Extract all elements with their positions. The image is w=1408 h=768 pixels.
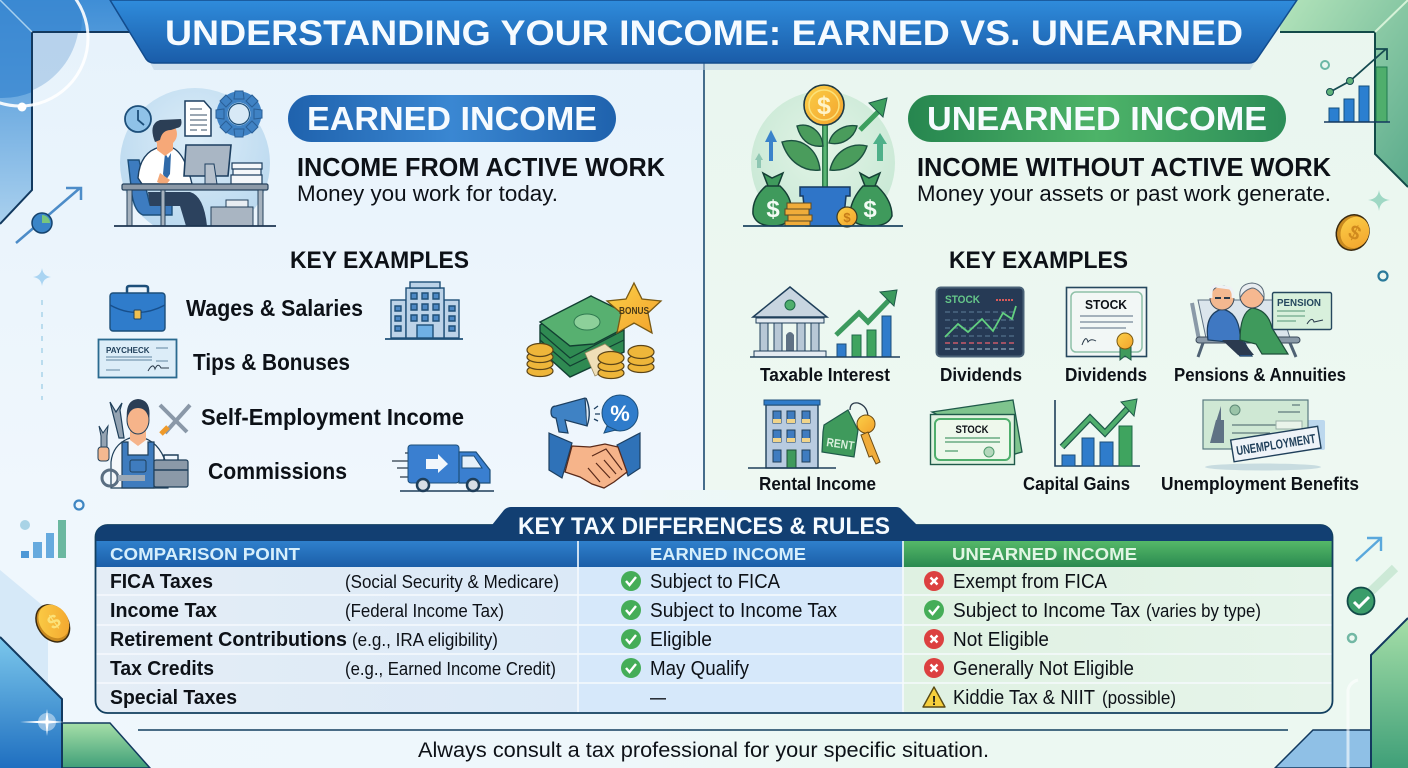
panel: tax comparison table <box>96 507 1332 713</box>
decoration: left coin: $ <box>44 610 65 634</box>
icon: megaphone and percent bubble <box>551 395 638 433</box>
icon: plant with coin <box>743 85 903 235</box>
pill: unearned income <box>908 95 1286 142</box>
text: capital gains: Capital Gains <box>1023 474 1130 494</box>
icon: stock notes: STOCK <box>956 424 989 436</box>
text: rental income: Rental Income <box>759 474 876 494</box>
footer note: Always consult a tax professional for your specific situation. <box>418 738 989 762</box>
icon: capital gains chart <box>1055 399 1140 466</box>
row: income tax: Subject to Income Tax <box>650 600 837 622</box>
row: FICA taxes: FICA Taxes <box>110 571 213 593</box>
decoration: right sparkle, coin and ring: $ <box>1345 221 1364 246</box>
row: FICA taxes <box>110 571 1108 593</box>
text: tips and bonuses: Tips & Bonuses <box>193 349 350 375</box>
text: unemployment benefits: Unemployment Benefits <box>1161 474 1359 494</box>
icon: paycheck: PAYCHECK <box>106 346 150 355</box>
icon: plant with coin: $ <box>843 210 851 225</box>
tab: table heading: KEY TAX DIFFERENCES & RULES <box>518 513 890 540</box>
icon: handshake <box>549 433 640 488</box>
row: retirement contributions <box>110 629 1049 651</box>
decoration: top right mini chart <box>1321 49 1390 122</box>
icon: money stack with bonus star <box>527 283 661 378</box>
pill: earned income <box>288 95 616 142</box>
tab: table heading <box>96 507 1332 541</box>
text: dividends two: Dividends <box>1065 365 1147 385</box>
corner: bottom left <box>0 570 150 768</box>
icon: stock notes <box>930 400 1022 464</box>
decoration: left mini bars <box>20 500 84 558</box>
icon: retired couple with pension <box>1192 283 1332 357</box>
icon: rental building with key <box>748 400 880 468</box>
icon: retired couple with pension: PENSION <box>1277 297 1321 309</box>
row: retirement contributions: Not Eligible <box>953 629 1049 651</box>
icon: stock board <box>936 288 1024 356</box>
divider <box>703 62 705 490</box>
text: self-employment income: Self-Employment Income <box>201 404 464 430</box>
text: pensions and annuities: Pensions & Annuities <box>1174 365 1346 385</box>
row: special taxes: ! <box>932 693 936 708</box>
table header row: EARNED INCOME <box>650 544 806 564</box>
text: earned income definition <box>297 152 665 206</box>
table header row: COMPARISON POINT <box>110 544 300 564</box>
decoration: left arrow with dot <box>16 188 81 243</box>
text: commissions: Commissions <box>208 458 347 484</box>
row: income tax: Subject to Income Tax <box>953 600 1140 622</box>
row: retirement contributions: Eligible <box>650 629 712 651</box>
text: wages and salaries: Wages & Salaries <box>186 295 363 321</box>
row: income tax: (varies by type) <box>1146 601 1261 621</box>
row: income tax: (Federal Income Tax) <box>345 601 504 621</box>
row: special taxes: — <box>650 687 666 709</box>
heading: key examples left: KEY EXAMPLES <box>290 247 469 274</box>
row: special taxes <box>110 687 1176 709</box>
text: earned income definition: INCOME FROM ACTIVE WORK <box>297 152 665 182</box>
icon: plant with coin: $ <box>863 196 877 223</box>
corner: bottom right <box>1275 618 1408 768</box>
icon: plant with coin: $ <box>766 196 780 223</box>
row: tax credits: (e.g., Earned Income Credit) <box>345 659 556 679</box>
heading: key examples right: KEY EXAMPLES <box>949 247 1128 274</box>
icon: office building <box>385 282 463 339</box>
row: tax credits: May Qualify <box>650 658 749 680</box>
icon: delivery truck <box>392 445 494 491</box>
icon: paycheck <box>98 340 176 378</box>
text: unearned income definition <box>917 152 1331 206</box>
row: retirement contributions: (e.g., IRA eligibility) <box>352 630 498 650</box>
icon: money stack with bonus star: BONUS <box>619 306 649 317</box>
text: earned income definition: Money you work for today. <box>297 181 558 206</box>
pill: unearned income: UNEARNED INCOME <box>927 100 1267 137</box>
row: income tax: Income Tax <box>110 600 217 622</box>
row: income tax <box>110 600 1261 622</box>
icon: mechanic with tools <box>98 399 190 488</box>
row: FICA taxes: Exempt from FICA <box>953 571 1108 593</box>
text: dividends one: Dividends <box>940 365 1022 385</box>
icon: plant with coin: $ <box>817 92 831 120</box>
icon: bank with growth chart <box>750 287 900 357</box>
text: unearned income definition: INCOME WITHOUT ACTIVE WORK <box>917 152 1331 182</box>
row: tax credits: Generally Not Eligible <box>953 658 1134 680</box>
icon: briefcase <box>110 286 165 331</box>
icon: stock certificate: STOCK <box>1085 297 1128 312</box>
row: FICA taxes: Subject to FICA <box>650 571 781 593</box>
row: tax credits <box>110 658 1134 680</box>
decoration: left sparkle and dashes <box>33 268 51 400</box>
icon: stock certificate <box>1066 288 1146 360</box>
title banner <box>110 0 1297 70</box>
corner: top left <box>0 0 130 224</box>
decoration: left coin <box>29 598 77 648</box>
icon: office worker at desk <box>114 88 276 238</box>
table header row <box>96 541 1332 567</box>
icon: stock board: STOCK <box>945 294 980 306</box>
pill: earned income: EARNED INCOME <box>307 100 597 137</box>
decoration: right sparkle, coin and ring <box>1331 190 1390 280</box>
corner: top right <box>1280 0 1408 187</box>
decoration: right check, arrow and ring <box>1348 538 1395 642</box>
icon: unemployment check: UNEMPLOYMENT <box>1235 431 1317 458</box>
title banner: UNDERSTANDING YOUR INCOME: EARNED VS. UNEARNED <box>165 14 1243 53</box>
text: unearned income definition: Money your assets or past work generate. <box>917 181 1331 206</box>
icon: megaphone and percent bubble: % <box>610 401 630 426</box>
table body fills <box>96 525 1332 713</box>
row: special taxes: Special Taxes <box>110 687 237 709</box>
row: FICA taxes: (Social Security & Medicare) <box>345 572 559 592</box>
icon: unemployment check <box>1203 400 1325 470</box>
row: tax credits: Tax Credits <box>110 658 214 680</box>
row: retirement contributions: Retirement Contributions <box>110 629 347 651</box>
text: taxable interest: Taxable Interest <box>760 365 890 385</box>
row: special taxes: Kiddie Tax & NIIT <box>953 687 1095 709</box>
table header row: UNEARNED INCOME <box>952 544 1137 564</box>
row: special taxes: (possible) <box>1102 688 1176 708</box>
icon: rental building with key: RENT <box>826 435 856 453</box>
